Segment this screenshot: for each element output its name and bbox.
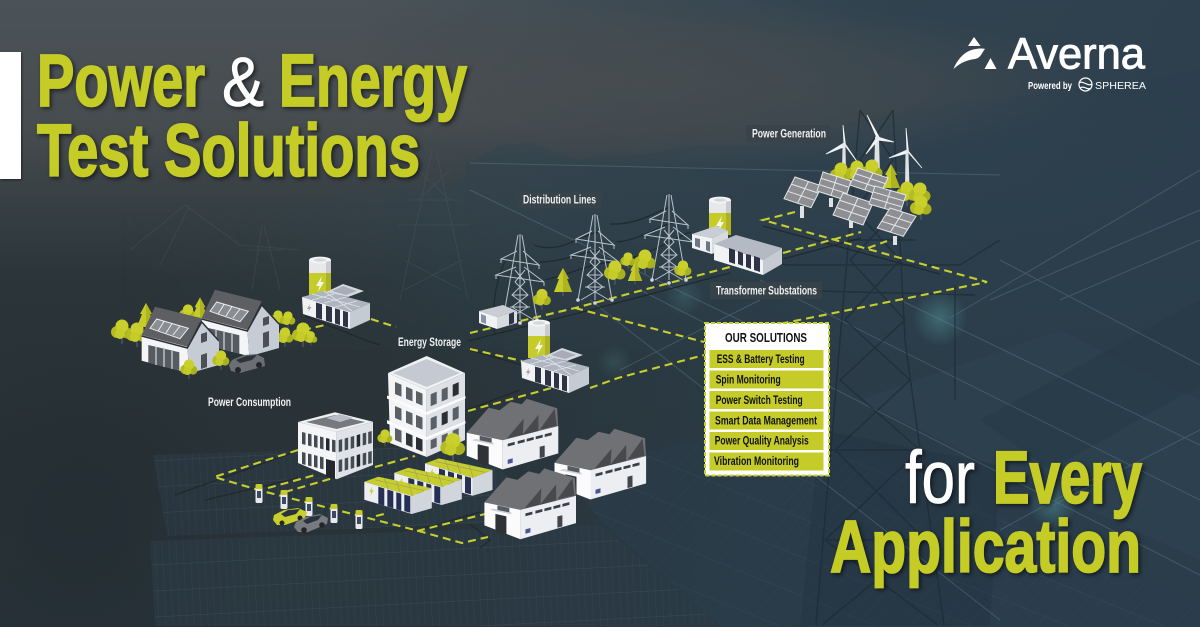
transmission wires [494, 207, 690, 335]
background: far pylons [130, 150, 470, 300]
title: Test Solutions [37, 109, 420, 192]
item: power quality analysis [710, 432, 824, 450]
storage unit near solutions box [521, 320, 589, 393]
icon: yellow car [273, 508, 307, 526]
roadside trees [533, 250, 691, 310]
EV chargers [256, 484, 362, 529]
icon: grey car [229, 354, 265, 373]
background: solar field left [150, 445, 720, 626]
houses: power consumption [111, 290, 317, 379]
title: Energy [279, 39, 467, 122]
icon: Spherea globe [1079, 78, 1092, 91]
trees by building [377, 429, 465, 461]
background: solar field right [560, 300, 1200, 626]
icon: grey car front [294, 514, 328, 533]
background: large dark pylon [715, 110, 1000, 625]
icon: wind turbine 1 [826, 125, 858, 172]
tagline: Every [993, 436, 1142, 519]
item: smart data management [710, 412, 824, 430]
battery container [302, 284, 370, 329]
item: power switch testing [710, 391, 824, 409]
small substation box by pylon 1 [479, 305, 517, 329]
battery container [521, 348, 589, 393]
pylon 1 [496, 234, 544, 324]
house front [142, 307, 219, 373]
heading: our solutions: OUR SOLUTIONS [725, 330, 807, 345]
label: energy storage: Energy Storage [398, 337, 461, 349]
label: distribution lines [519, 192, 601, 208]
item: power switch testing: Power Switch Testing [716, 393, 803, 407]
label: transformer substations: Transformer Substations [716, 286, 817, 298]
wordmark: Averna [1008, 29, 1146, 78]
distribution lines: pylons and trees [496, 194, 693, 324]
item: spin monitoring [710, 370, 824, 388]
icon: battery [709, 197, 731, 235]
label: power consumption: Power Consumption [208, 397, 291, 409]
label: transformer substations [710, 282, 822, 299]
tagline [830, 436, 1142, 588]
Spherea wordmark: SPHEREA [1095, 80, 1146, 92]
item: vibration monitoring: Vibration Monitoring [714, 454, 799, 468]
transformer substation [692, 197, 782, 275]
factory front [484, 468, 576, 539]
item: power quality analysis: Power Quality Analysis [715, 434, 809, 448]
icon: battery [309, 257, 331, 295]
factory top [467, 399, 558, 470]
item: ESS and battery testing [710, 350, 824, 368]
background: light streaks [470, 163, 1200, 620]
solar panels and wind turbines: power generation [784, 115, 932, 245]
icon: Averna mark [954, 37, 996, 69]
icon: battery [528, 320, 550, 358]
tall office building [377, 356, 466, 461]
accent bar [0, 52, 21, 179]
pylon 2 [571, 214, 619, 304]
tagline: for [905, 436, 975, 519]
connection lines [175, 212, 987, 548]
house back [202, 290, 279, 356]
solar panel array [784, 168, 916, 245]
title: & [222, 43, 264, 121]
pylon 3 [645, 194, 693, 284]
green battery units [364, 458, 492, 514]
logo: Averna [954, 29, 1146, 92]
title [37, 39, 467, 192]
storage unit near houses [302, 257, 370, 329]
low office building [298, 412, 373, 479]
item: smart data management: Smart Data Management [715, 414, 817, 428]
icon: wind turbine 2 [866, 115, 894, 175]
icon: wind turbine 3 [889, 128, 922, 188]
item: ESS and battery testing: ESS & Battery Testing [717, 352, 805, 366]
item: spin monitoring: Spin Monitoring [716, 372, 781, 386]
powered by: Powered by [1028, 80, 1072, 92]
label: power generation: Power Generation [752, 128, 826, 140]
panel: our solutions [705, 323, 829, 476]
factories [467, 399, 646, 539]
trees behind solar panels [830, 160, 932, 220]
front trees [180, 350, 229, 379]
factory back right [554, 429, 646, 500]
label: power generation [746, 125, 830, 142]
label: distribution lines: Distribution Lines [523, 194, 596, 206]
trees around houses [111, 297, 317, 347]
title: Power [37, 39, 205, 122]
